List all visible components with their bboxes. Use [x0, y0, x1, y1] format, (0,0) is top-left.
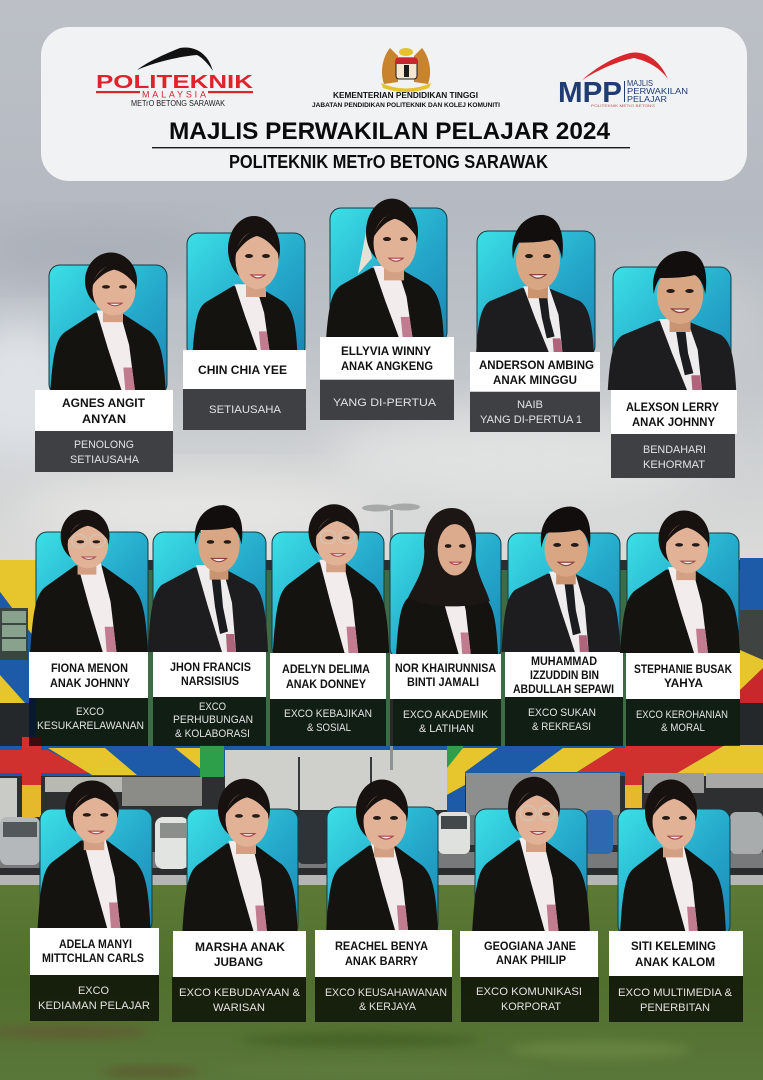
- name: [270, 653, 386, 699]
- title: MAJLIS PERWAKILAN PELAJAR 2024: [169, 118, 611, 145]
- role: [609, 976, 743, 1022]
- role: [626, 699, 740, 746]
- ministry text: KEMENTERIAN PENDIDIKAN TINGGI: [333, 91, 478, 100]
- name: BINTI JAMALI: [407, 675, 479, 689]
- name: MARSHA ANAK: [195, 940, 285, 954]
- name: STEPHANIE BUSAK: [634, 662, 732, 676]
- role: EXCO KOMUNIKASI: [476, 986, 582, 998]
- name: NOR KHAIRUNNISA: [395, 661, 496, 675]
- role: EXCO: [199, 701, 226, 713]
- role: [29, 698, 148, 746]
- logo: Malaysian coat of arms: [381, 48, 431, 92]
- name: MUHAMMAD: [531, 654, 597, 668]
- role: [505, 697, 623, 746]
- background: grass field: [0, 885, 763, 1080]
- role: YANG DI-PERTUA 1: [480, 414, 582, 426]
- portrait: [396, 508, 498, 655]
- name: [609, 931, 743, 976]
- portrait: [476, 215, 594, 352]
- name: ANAK JOHNNY: [632, 415, 715, 429]
- name: [390, 654, 501, 699]
- name: REACHEL BENYA: [335, 939, 428, 953]
- ministry text: JABATAN PENDIDIKAN POLITEKNIK DAN KOLEJ KOMUNITI: [312, 102, 500, 109]
- member: Jhon Francis Narsisius: [148, 505, 268, 746]
- name: ANAK JOHNNY: [50, 676, 130, 690]
- name: FIONA MENON: [51, 661, 128, 675]
- name: [183, 350, 306, 389]
- name: [35, 390, 173, 431]
- role: [183, 389, 306, 430]
- member: Marsha Anak Jubang: [172, 779, 306, 1022]
- logo: Politeknik Malaysia: MALAYSIA: [142, 90, 206, 100]
- role: [270, 699, 386, 746]
- role: EXCO KEBUDAYAAN &: [179, 987, 301, 999]
- role: EXCO KEBAJIKAN: [284, 708, 372, 720]
- role: SETIAUSAHA: [209, 404, 282, 416]
- role: YANG DI-PERTUA: [333, 397, 437, 409]
- name: ANAK MINGGU: [493, 373, 577, 387]
- name: ABDULLAH SEPAWI: [513, 682, 614, 696]
- role: & KERJAYA: [359, 1001, 417, 1013]
- role: EXCO SUKAN: [528, 707, 596, 719]
- name: [153, 652, 266, 697]
- role: NAIB: [517, 399, 543, 411]
- logo: MPP: MPP: [558, 77, 622, 109]
- member: Reachel Benya Anak Barry: [315, 780, 452, 1022]
- member: Muhammad Izzuddin Bin Abdullah Sepawi: [502, 507, 623, 746]
- member: Adelyn Delima Anak Donney: [270, 504, 389, 746]
- role: PENERBITAN: [640, 1002, 710, 1014]
- name: [173, 931, 306, 977]
- member: Fiona Menon Anak Johnny: [29, 510, 148, 746]
- role: & REKREASI: [532, 721, 591, 733]
- portrait: [608, 251, 736, 390]
- member: Nor Khairunnisa Binti Jamali: [390, 508, 501, 746]
- name: NARSISIUS: [181, 674, 239, 688]
- role: [470, 392, 600, 432]
- member: Alexson Lerry Anak Johnny: [608, 251, 737, 478]
- role: PERHUBUNGAN: [173, 714, 253, 726]
- logo: MPP: MAJLIS: [627, 78, 653, 88]
- role: [390, 699, 501, 746]
- name: [626, 653, 740, 699]
- member: Anderson Ambing Anak Minggu: [470, 215, 600, 432]
- role: EXCO: [76, 706, 104, 718]
- name: MITTCHLAN CARLS: [42, 951, 144, 965]
- role: EXCO MULTIMEDIA &: [618, 987, 733, 999]
- role: EXCO KEUSAHAWANAN: [325, 987, 447, 999]
- member: Ellyvia Winny Anak Angkeng: [320, 199, 454, 420]
- name: CHIN CHIA YEE: [198, 363, 287, 377]
- role: [461, 977, 599, 1022]
- portrait: [38, 780, 150, 928]
- name: [611, 390, 737, 434]
- name: [470, 352, 600, 391]
- name: [29, 652, 148, 698]
- name: ANAK PHILIP: [496, 953, 566, 967]
- role: WARISAN: [213, 1002, 265, 1014]
- role: EXCO AKADEMIK: [403, 709, 489, 721]
- portrait: [30, 510, 148, 652]
- name: GEOGIANA JANE: [484, 939, 576, 953]
- portrait: [50, 252, 166, 390]
- logo: MPP: POLITEKNIK METrO BETONG: [591, 103, 655, 108]
- name: JUBANG: [214, 955, 263, 969]
- background: cloudy sky: [0, 0, 763, 600]
- name: AGNES ANGIT: [62, 396, 146, 410]
- portrait: [620, 510, 740, 653]
- background: street lamp: [362, 504, 420, 770]
- logo: Politeknik Malaysia: POLITEKNIK: [96, 72, 253, 92]
- logo: Politeknik Malaysia: METrO BETONG SARAWAK: [131, 99, 226, 108]
- role: KEHORMAT: [643, 459, 705, 471]
- logo: Politeknik Malaysia: [96, 47, 253, 108]
- role: KESUKARELAWANAN: [37, 720, 144, 732]
- name: ANAK DONNEY: [286, 677, 366, 691]
- header panel: [41, 27, 747, 181]
- role: & LATIHAN: [419, 723, 474, 735]
- role: [172, 977, 306, 1022]
- portrait: [193, 216, 297, 350]
- name: ANAK ANGKENG: [341, 359, 433, 373]
- name: ANAK KALOM: [635, 955, 715, 969]
- name: ANDERSON AMBING: [479, 358, 594, 372]
- member: Adela Manyi Mittchlan Carls: [30, 780, 159, 1021]
- portrait: [148, 505, 268, 652]
- role: KEDIAMAN PELAJAR: [38, 1000, 150, 1012]
- portrait: [620, 780, 726, 931]
- portrait: [273, 504, 389, 653]
- name: YAHYA: [664, 676, 703, 690]
- role: [153, 697, 266, 746]
- member: Geogiana Jane Anak Philip: [460, 777, 599, 1022]
- name: JHON FRANCIS: [170, 660, 251, 674]
- member: Siti Keleming Anak Kalom: [609, 780, 743, 1022]
- logo: MPP: PELAJAR: [627, 94, 667, 104]
- name: ANAK BARRY: [345, 954, 418, 968]
- role: & MORAL: [661, 722, 705, 734]
- name: [505, 652, 623, 697]
- portrait: [472, 777, 590, 931]
- role: EXCO KEROHANIAN: [636, 709, 728, 721]
- name: [315, 930, 452, 977]
- name: [30, 928, 159, 975]
- member: Chin Chia Yee: [183, 216, 306, 430]
- role: [30, 975, 159, 1021]
- portrait: [326, 780, 438, 930]
- role: KORPORAT: [501, 1001, 561, 1013]
- role: BENDAHARI: [643, 444, 706, 456]
- role: & SOSIAL: [307, 722, 351, 734]
- portrait: [182, 779, 298, 931]
- background: parked cars: [0, 810, 763, 869]
- name: IZZUDDIN BIN: [530, 668, 599, 682]
- name: ALEXSON LERRY: [626, 400, 719, 414]
- name: ADELA MANYI: [59, 937, 132, 951]
- logo: MPP: PERWAKILAN: [627, 86, 688, 96]
- ministry text: [312, 91, 500, 109]
- portrait: [502, 507, 620, 652]
- role: SETIAUSAHA: [70, 454, 140, 466]
- member: Stephanie Busak Yahya: [620, 510, 740, 746]
- role: PENOLONG: [74, 439, 134, 451]
- name: SITI KELEMING: [631, 939, 716, 953]
- logo: MPP: [558, 52, 688, 109]
- role: [315, 977, 452, 1022]
- background: colourful campus building: [0, 558, 763, 885]
- role: & KOLABORASI: [175, 728, 250, 740]
- portrait: [326, 199, 444, 337]
- name: ADELYN DELIMA: [282, 662, 370, 676]
- role: [320, 380, 454, 420]
- name: ELLYVIA WINNY: [341, 344, 431, 358]
- role: [611, 434, 735, 478]
- role: [35, 431, 173, 472]
- subtitle: POLITEKNIK METrO BETONG SARAWAK: [229, 152, 548, 172]
- member: Agnes Angit Anyan: [35, 252, 173, 472]
- name: [320, 337, 454, 379]
- role: EXCO: [78, 985, 109, 997]
- name: ANYAN: [82, 412, 126, 426]
- name: [460, 931, 598, 977]
